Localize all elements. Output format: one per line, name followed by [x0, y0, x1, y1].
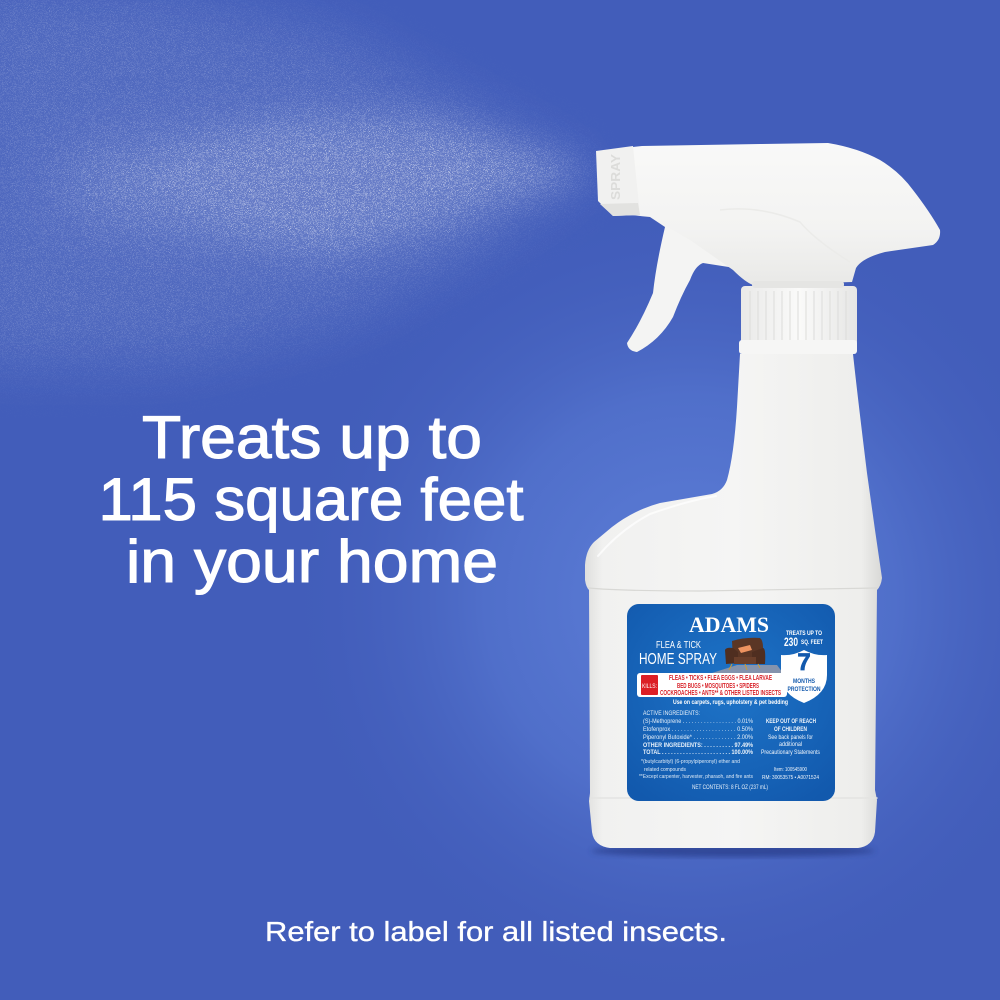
- warning block: OF CHILDREN: [774, 727, 807, 733]
- treats up to 230 sq. feet: TREATS UP TO: [786, 630, 822, 637]
- warning block: additional: [779, 742, 802, 748]
- ingredients table: TOTAL . . . . . . . . . . . . . . . . . . . . . . . 100.00%: [643, 750, 754, 756]
- trigger lever: [627, 217, 735, 352]
- footnotes: related compounds: [644, 767, 686, 773]
- badge: 7 months protection: PROTECTION: [788, 686, 821, 693]
- badge: 7 months protection: [781, 649, 827, 703]
- footnote: Refer to label for all listed insects.: [265, 916, 727, 947]
- brand: ADAMS: ADAMS: [689, 612, 769, 637]
- sprayer head: [632, 143, 940, 285]
- collar: [739, 281, 857, 354]
- footnotes: **Except carpenter, harvester, pharaoh, and fire ants: [639, 774, 753, 780]
- ingredients table: [643, 711, 754, 756]
- product name: [639, 640, 717, 668]
- treats up to 230 sq. feet: SQ. FEET: [801, 639, 823, 646]
- spray mist: [0, 0, 598, 390]
- kills strip: BED BUGS • MOSQUITOES • SPIDERS: [677, 683, 759, 690]
- product name: FLEA & TICK: [656, 640, 701, 651]
- illustration: armchair on rug: [712, 638, 783, 673]
- nozzle with embossed SPRAY: SPRAY: [608, 154, 623, 200]
- kills strip: FLEAS • TICKS • FLEA EGGS • FLEA LARVAE: [669, 675, 772, 682]
- badge: 7 months protection: 7: [797, 649, 811, 676]
- ingredients table: OTHER INGREDIENTS: . . . . . . . . . . 97.49%: [643, 743, 754, 749]
- product: spray bottle: [585, 143, 940, 857]
- ingredients table: (S)-Methoprene . . . . . . . . . . . . . . . . . . 0.01%: [643, 719, 754, 725]
- headline: Treats up to 115 square feet in your home: Treats up to: [142, 404, 482, 471]
- warning block: See back panels for: [768, 735, 813, 741]
- kills strip: COCKROACHES • ANTS** & OTHER LISTED INSECTS: [660, 690, 781, 697]
- label background: [627, 604, 835, 801]
- kills strip: [637, 673, 787, 697]
- ingredients table: Etofenprox . . . . . . . . . . . . . . . . . . . . . 0.50%: [643, 727, 754, 733]
- treats up to 230 sq. feet: 230: [784, 635, 798, 649]
- treats up to 230 sq. feet: [784, 630, 823, 649]
- usage line: Use on carpets, rugs, upholstery & pet bedding: [673, 699, 788, 706]
- footnotes: *(butylcarbityl) (6-propylpiperonyl) ether and: [641, 759, 740, 765]
- warning block: KEEP OUT OF REACH: [766, 719, 816, 725]
- bottle body: [585, 354, 882, 848]
- warning block: RM: 30053575 • A0071524: [762, 775, 819, 781]
- product label: [627, 604, 835, 801]
- bottle shoulder highlights: [589, 496, 877, 798]
- badge: 7 months protection: MONTHS: [793, 678, 816, 685]
- headline: Treats up to 115 square feet in your home: 115 square feet: [98, 466, 524, 533]
- headline: Treats up to 115 square feet in your home: in your home: [126, 528, 498, 595]
- kills strip: KILLS:: [642, 683, 657, 690]
- warning block: [761, 719, 820, 781]
- nozzle with embossed SPRAY: [596, 146, 640, 216]
- warning block: Item: 100545900: [774, 767, 807, 773]
- net contents: NET CONTENTS: 8 FL OZ (237 mL): [692, 785, 768, 791]
- bottle shadow: [591, 845, 875, 857]
- headline: Treats up to 115 square feet in your home: [98, 404, 524, 595]
- warning block: Precautionary Statements: [761, 750, 820, 756]
- ingredients table: Piperonyl Butoxide* . . . . . . . . . . . . . . 2.00%: [643, 735, 754, 741]
- footnotes: [639, 759, 753, 780]
- ingredients table: ACTIVE INGREDIENTS:: [643, 711, 700, 717]
- product name: HOME SPRAY: [639, 651, 717, 668]
